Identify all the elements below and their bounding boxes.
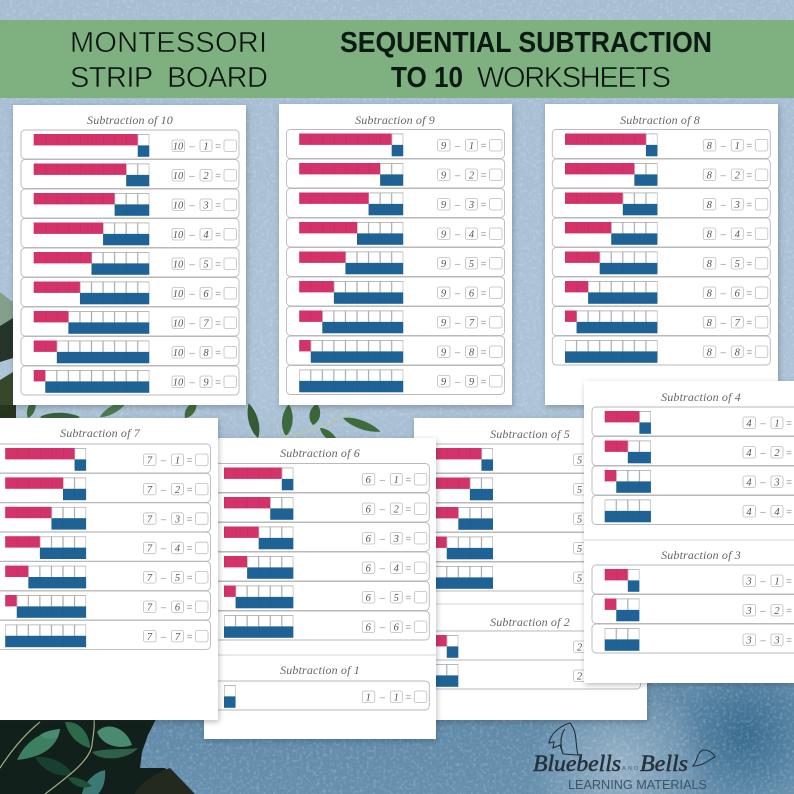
row 8-7 (552, 306, 770, 336)
row 9-7: 9 (441, 318, 447, 329)
worksheet: subtraction of 5 and 2 (414, 418, 647, 720)
row 3-3 (592, 624, 794, 653)
row 10-3 (21, 189, 239, 218)
row 10-6: = (215, 289, 221, 300)
heading: Subtraction of 8 (620, 113, 700, 127)
row 5-4: 5 (577, 544, 582, 555)
row 9-9: 9 (469, 377, 475, 388)
row 9-9 (286, 366, 504, 394)
row 3-2: = (786, 606, 792, 617)
row 6-3 (211, 522, 429, 552)
row 4-2: 2 (774, 448, 780, 459)
row 4-3: = (786, 478, 792, 488)
row 10-1: = (215, 142, 221, 152)
row 7-5: 7 (147, 573, 153, 584)
row 7-7 (0, 620, 210, 649)
row 10-6: 6 (203, 289, 209, 300)
row 5-5: 5 (577, 574, 582, 584)
row 9-6: = (481, 288, 487, 300)
row 7-3: – (161, 514, 167, 525)
row 10-2: 10 (173, 171, 184, 182)
row 7-4: 4 (175, 544, 181, 555)
row 8-4: – (721, 230, 727, 240)
row 6-1 (211, 464, 429, 492)
row 10-9: – (189, 378, 195, 388)
row 10-4: – (189, 230, 195, 241)
row 6-2: = (405, 504, 411, 516)
row 10-4: 4 (203, 230, 209, 241)
row 9-6 (286, 277, 504, 306)
row 6-1: 1 (394, 475, 399, 486)
row 9-5: – (455, 259, 461, 270)
row 6-2: 2 (394, 504, 400, 516)
worksheet: subtraction of 10 (13, 105, 246, 405)
row 6-2 (211, 493, 429, 522)
row 2-1 (422, 631, 640, 660)
row 4-3: – (760, 478, 766, 488)
row 8-7: = (746, 318, 752, 329)
row 8-5: 5 (735, 259, 740, 270)
row 7-7: – (161, 632, 167, 643)
row 1-1 (211, 681, 429, 710)
worksheet: subtraction of 4 and 3 (584, 381, 794, 683)
row 7-1: 7 (147, 456, 153, 466)
worksheet: subtraction of 6 and 1 (204, 438, 436, 739)
row 7-4: – (161, 544, 167, 555)
row 7-5: – (161, 573, 167, 584)
logo: Bluebells and Bells Learning Materials: Bluebells (533, 751, 621, 776)
row 8-1: 8 (707, 141, 713, 152)
row 10-7: 7 (203, 318, 209, 330)
row 3-3: 3 (773, 636, 780, 646)
row 10-9: 9 (203, 378, 209, 388)
row 8-3 (552, 188, 770, 218)
row 7-2 (0, 473, 210, 502)
row 7-6: 6 (175, 602, 181, 614)
row 7-3: 3 (174, 514, 180, 525)
logo: Bluebells and Bells Learning Materials (533, 723, 715, 792)
row 10-2: 2 (203, 171, 209, 182)
row 4-4 (592, 496, 794, 524)
row 5-1: 5 (577, 456, 582, 466)
row 9-1: = (481, 141, 487, 152)
row 3-2 (592, 594, 794, 624)
row 4-4: 4 (774, 507, 780, 518)
row 7-4 (0, 532, 210, 561)
row 1-1: 1 (366, 692, 371, 704)
row 9-5: = (481, 259, 487, 270)
row 3-3: = (786, 636, 792, 646)
row 9-6: 9 (441, 288, 447, 300)
row 6-4: – (380, 564, 386, 574)
row 8-3: = (746, 200, 752, 211)
row 6-6: 6 (394, 622, 400, 634)
row 9-3 (286, 188, 504, 218)
row 7-6 (0, 591, 210, 620)
row 7-1: 1 (175, 456, 180, 466)
row 8-6: 8 (707, 288, 713, 300)
row 10-3: – (189, 200, 195, 212)
row 6-5 (211, 582, 429, 610)
row 8-7: 7 (735, 318, 741, 329)
row 8-5 (552, 248, 770, 276)
row 8-8: – (721, 348, 727, 358)
row 9-9: = (481, 377, 487, 388)
row 8-5: = (746, 259, 752, 270)
row 7-5 (0, 562, 210, 591)
row 8-8: 8 (707, 348, 713, 358)
row 10-1: – (189, 142, 195, 152)
row 6-5: 6 (366, 593, 372, 604)
row 3-1: 3 (745, 576, 752, 588)
row 9-2: = (481, 170, 487, 182)
row 9-6: 6 (469, 288, 475, 300)
row 9-5: 5 (469, 259, 474, 270)
row 10-9: 10 (173, 378, 184, 388)
logo: Bluebells and Bells Learning Materials: AND (622, 766, 638, 772)
row 9-6: – (455, 288, 461, 300)
row 6-1: = (405, 475, 411, 486)
row 7-4: 7 (147, 544, 153, 555)
row 6-5: = (405, 593, 411, 604)
row 7-5: = (187, 573, 193, 584)
row 5-5 (422, 562, 640, 591)
title: Montessori strip board: STRIP BOARD (70, 62, 268, 94)
row 9-5 (286, 248, 504, 276)
row 10-7: 10 (173, 318, 184, 330)
row 8-2: 2 (735, 170, 741, 182)
row 10-3: = (215, 200, 221, 212)
row 3-3: – (760, 636, 766, 646)
row 6-4: = (405, 564, 411, 574)
logo: Bluebells and Bells Learning Materials: LEARNING MATERIALS (568, 777, 707, 792)
row 6-4 (211, 552, 429, 581)
row 7-2: – (161, 485, 167, 496)
row 7-1 (0, 444, 210, 473)
heading: Subtraction of 9 (355, 113, 435, 127)
row 4-2: 4 (746, 448, 752, 459)
row 9-7: – (455, 318, 461, 329)
logo: Bluebells and Bells Learning Materials: Bells (640, 751, 688, 776)
row 9-8: 8 (469, 348, 475, 358)
row 10-8: = (215, 348, 221, 359)
row 6-1: – (380, 475, 386, 486)
heading: Subtraction of 6 (280, 446, 360, 460)
title: Sequential subtraction to 10 worksheets: WORKSHEETS (477, 62, 671, 94)
row 9-7: = (481, 318, 487, 329)
title: Montessori strip board (70, 27, 268, 94)
row 9-7 (286, 306, 504, 336)
row 3-1: – (760, 576, 766, 588)
row 8-6 (552, 277, 770, 306)
row 4-3: 4 (746, 478, 752, 488)
row 10-9: = (215, 378, 221, 388)
row 4-3 (592, 466, 794, 495)
row 10-7 (21, 307, 239, 336)
icon: small bell (693, 750, 715, 766)
row 5-1 (422, 444, 640, 473)
row 7-6: = (187, 602, 193, 614)
row 9-2: – (455, 170, 461, 182)
row 4-1: 4 (746, 418, 752, 430)
row 3-2: – (760, 606, 766, 617)
banner: green title band (0, 20, 794, 98)
row 4-2: – (760, 448, 766, 459)
row 4-4: – (760, 507, 766, 518)
row 4-1: = (786, 418, 792, 430)
row 6-3: – (380, 534, 386, 545)
row 6-3: 6 (366, 534, 372, 545)
worksheet: subtraction of 9 (279, 104, 512, 405)
row 6-3: 3 (393, 534, 399, 545)
row 8-1 (552, 130, 770, 158)
row 9-1: 9 (441, 141, 447, 152)
row 5-3: 5 (577, 514, 582, 526)
row 9-8: 9 (441, 348, 447, 358)
row 8-6: 6 (735, 288, 741, 300)
row 8-3: 8 (707, 200, 713, 211)
row 8-4: 8 (707, 230, 713, 240)
row 3-1: 1 (774, 576, 780, 588)
row 7-3: = (187, 514, 193, 525)
row 9-9: 9 (441, 377, 447, 388)
row 10-5: 5 (203, 260, 209, 270)
row 1-1: = (405, 692, 411, 704)
row 8-7: – (721, 318, 727, 329)
row 6-3: = (405, 534, 411, 545)
row 9-9: – (455, 377, 461, 388)
row 8-6: = (746, 288, 752, 300)
row 9-3: – (455, 200, 461, 211)
title: Sequential subtraction to 10 worksheets: SEQUENTIAL SUBTRACTION (340, 27, 712, 59)
row 10-2 (21, 160, 239, 188)
row 7-5: 5 (175, 573, 180, 584)
heading: Subtraction of 2 (490, 615, 570, 629)
row 6-5: 5 (394, 593, 399, 604)
row 9-3: 9 (441, 200, 447, 211)
row 10-6 (21, 278, 239, 306)
row 10-4 (21, 218, 239, 248)
row 8-5: 8 (707, 259, 713, 270)
row 10-1: 10 (173, 142, 184, 152)
row 9-2: 9 (441, 170, 447, 182)
row 2-2 (422, 660, 640, 689)
heading: Subtraction of 5 (490, 427, 570, 441)
row 6-1: 6 (366, 475, 372, 486)
row 6-6: – (380, 622, 386, 634)
row 9-2: 2 (469, 170, 475, 182)
row 3-3: 3 (745, 636, 752, 646)
row 10-5 (21, 248, 239, 277)
title: Sequential subtraction to 10 worksheets (340, 27, 712, 94)
row 8-1: = (746, 141, 752, 152)
row 7-3 (0, 503, 210, 532)
row 9-7: 7 (469, 318, 475, 329)
row 9-8: = (481, 348, 487, 358)
row 3-1 (592, 565, 794, 594)
row 7-6: – (161, 602, 167, 614)
heading: Subtraction of 3 (661, 548, 741, 562)
row 7-2: 2 (175, 485, 181, 496)
row 9-8: – (455, 348, 461, 358)
row 9-1: 1 (469, 141, 474, 152)
foliage: upper left and centre olive leaves (0, 292, 382, 446)
row 8-3: – (721, 200, 727, 211)
row 8-4 (552, 218, 770, 247)
row 9-4 (286, 218, 504, 247)
row 2-1: 2 (577, 642, 583, 654)
heading: Subtraction of 1 (280, 663, 360, 677)
row 10-3: 3 (202, 200, 209, 212)
row 10-1: 1 (203, 142, 209, 152)
row 4-2 (592, 436, 794, 466)
row 6-5: – (380, 593, 386, 604)
row 9-4: = (481, 230, 487, 240)
row 8-5: – (721, 259, 727, 270)
row 4-1: 1 (774, 418, 780, 430)
worksheet: subtraction of 8 (545, 104, 778, 405)
heading: Subtraction of 4 (661, 390, 741, 404)
heading: Subtraction of 10 (87, 113, 173, 127)
row 8-1: – (721, 141, 727, 152)
row 10-5: 10 (173, 260, 184, 270)
worksheet: subtraction of 7 (0, 418, 218, 720)
row 1-1: 1 (394, 692, 399, 704)
row 8-7: 8 (707, 318, 713, 329)
row 7-7: 7 (175, 632, 181, 643)
row 7-1: – (161, 456, 167, 466)
row 10-6: – (189, 289, 195, 300)
row 6-6: = (405, 622, 411, 634)
row 7-6: 7 (147, 602, 153, 614)
row 8-2: – (721, 170, 727, 182)
row 5-4 (422, 532, 640, 562)
row 8-4: = (746, 230, 752, 240)
row 10-8: 8 (203, 348, 209, 359)
row 9-3: = (481, 200, 487, 211)
row 4-1: – (760, 418, 766, 430)
row 4-4: = (786, 507, 792, 518)
title: Montessori strip board: MONTESSORI (70, 27, 267, 59)
row 6-4: 4 (394, 564, 400, 574)
icon: bluebell flower (549, 723, 578, 755)
row 9-4: 4 (469, 230, 475, 240)
row 6-6: 6 (366, 622, 372, 634)
row 7-7: = (187, 632, 193, 643)
row 10-7: = (215, 318, 221, 330)
row 7-2: = (187, 485, 193, 496)
row 7-4: = (187, 544, 193, 555)
row 9-2 (286, 159, 504, 188)
row 10-7: – (189, 318, 195, 330)
row 7-3: 7 (147, 514, 153, 525)
row 7-2: 7 (147, 485, 153, 496)
title: Sequential subtraction to 10 worksheets: TO 10 (391, 62, 463, 94)
row 8-2: 8 (707, 170, 713, 182)
foliage: bottom left dark leaves (0, 715, 195, 794)
row 10-5: – (189, 260, 195, 270)
row 10-5: = (215, 260, 221, 270)
row 10-2: = (215, 171, 221, 182)
row 2-2: 2 (577, 672, 583, 682)
row 10-3: 10 (173, 200, 184, 212)
row 10-4: = (215, 230, 221, 241)
row 10-8: – (189, 348, 195, 359)
row 8-2: = (746, 170, 752, 182)
row 10-9 (21, 366, 239, 395)
row 9-3: 3 (468, 200, 474, 211)
row 7-1: = (187, 456, 193, 466)
row 8-8: 8 (735, 348, 741, 358)
row 6-2: 6 (366, 504, 372, 516)
row 8-2 (552, 159, 770, 188)
row 10-6: 10 (173, 289, 184, 300)
row 9-4: 9 (441, 230, 447, 240)
row 8-4: 4 (735, 230, 741, 240)
row 6-4: 6 (366, 564, 372, 574)
row 4-2: = (786, 448, 792, 459)
row 9-4: – (455, 230, 461, 240)
row 4-4: 4 (746, 507, 752, 518)
row 8-6: – (721, 288, 727, 300)
row 1-1: – (380, 692, 386, 704)
row 8-1: 1 (735, 141, 740, 152)
row 4-3: 3 (773, 478, 780, 488)
row 10-8 (21, 336, 239, 366)
row 5-2 (422, 474, 640, 502)
row 9-5: 9 (441, 259, 447, 270)
row 10-8: 10 (173, 348, 184, 359)
row 3-2: 2 (774, 606, 780, 617)
row 9-1: – (455, 141, 461, 152)
row 5-2: 5 (577, 485, 582, 496)
row 9-1 (286, 130, 504, 158)
row 9-8 (286, 336, 504, 365)
row 7-7: 7 (147, 632, 153, 643)
row 3-2: 3 (745, 606, 752, 617)
row 4-1 (592, 407, 794, 436)
row 8-8: = (746, 348, 752, 358)
row 10-2: – (189, 171, 195, 182)
row 6-2: – (380, 504, 386, 516)
row 3-1: = (786, 576, 792, 588)
row 8-3: 3 (734, 200, 740, 211)
row 8-8 (552, 336, 770, 365)
row 10-4: 10 (173, 230, 184, 241)
row 6-6 (211, 611, 429, 640)
row 10-1 (21, 130, 239, 159)
row 5-3 (422, 503, 640, 532)
heading: Subtraction of 7 (60, 426, 141, 440)
